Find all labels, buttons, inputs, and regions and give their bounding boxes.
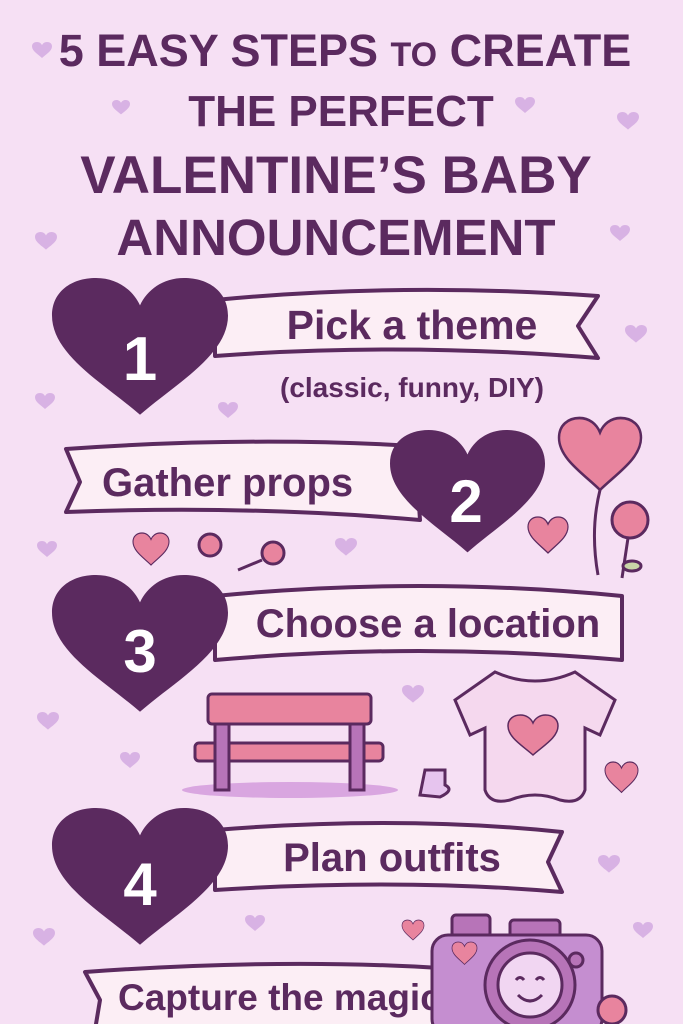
title: 5 EASY STEPS TO CREATE (59, 25, 631, 76)
step 3 (52, 575, 622, 712)
ribbon 2 (66, 442, 420, 520)
heart 1 (52, 278, 228, 415)
step 1 (52, 278, 598, 415)
bench (182, 694, 398, 798)
step 4: Plan outfits (283, 836, 501, 880)
title: VALENTINE’S BABY (80, 146, 592, 205)
heart 4 (52, 808, 228, 945)
step 1: (classic, funny, DIY) (280, 372, 544, 403)
step 2: Gather props (102, 461, 353, 505)
heart 3 (52, 575, 228, 712)
title: THE PERFECT (188, 87, 494, 136)
rose (612, 502, 648, 538)
heart 2 (390, 430, 545, 552)
balloon (559, 418, 641, 490)
props decorations (133, 418, 648, 578)
heart 2: 2 (449, 468, 483, 535)
step 3: Choose a location (256, 602, 600, 646)
heart 4: 4 (123, 851, 157, 918)
step 4 (52, 808, 562, 945)
step 2 (66, 430, 545, 552)
title: ANNOUNCEMENT (116, 209, 556, 266)
onesie (420, 672, 638, 801)
heart 1: 1 (123, 325, 157, 394)
title (59, 25, 631, 266)
step 1: Pick a theme (287, 302, 537, 348)
ribbon 3 (215, 586, 622, 660)
heart 3: 3 (123, 618, 157, 685)
camera (402, 915, 626, 1024)
ribbon 4 (215, 823, 562, 892)
step 5 (85, 964, 441, 1024)
ribbon 1 (215, 290, 598, 358)
ribbon 5 (85, 964, 440, 1024)
step 5: Capture the magic (118, 977, 441, 1018)
